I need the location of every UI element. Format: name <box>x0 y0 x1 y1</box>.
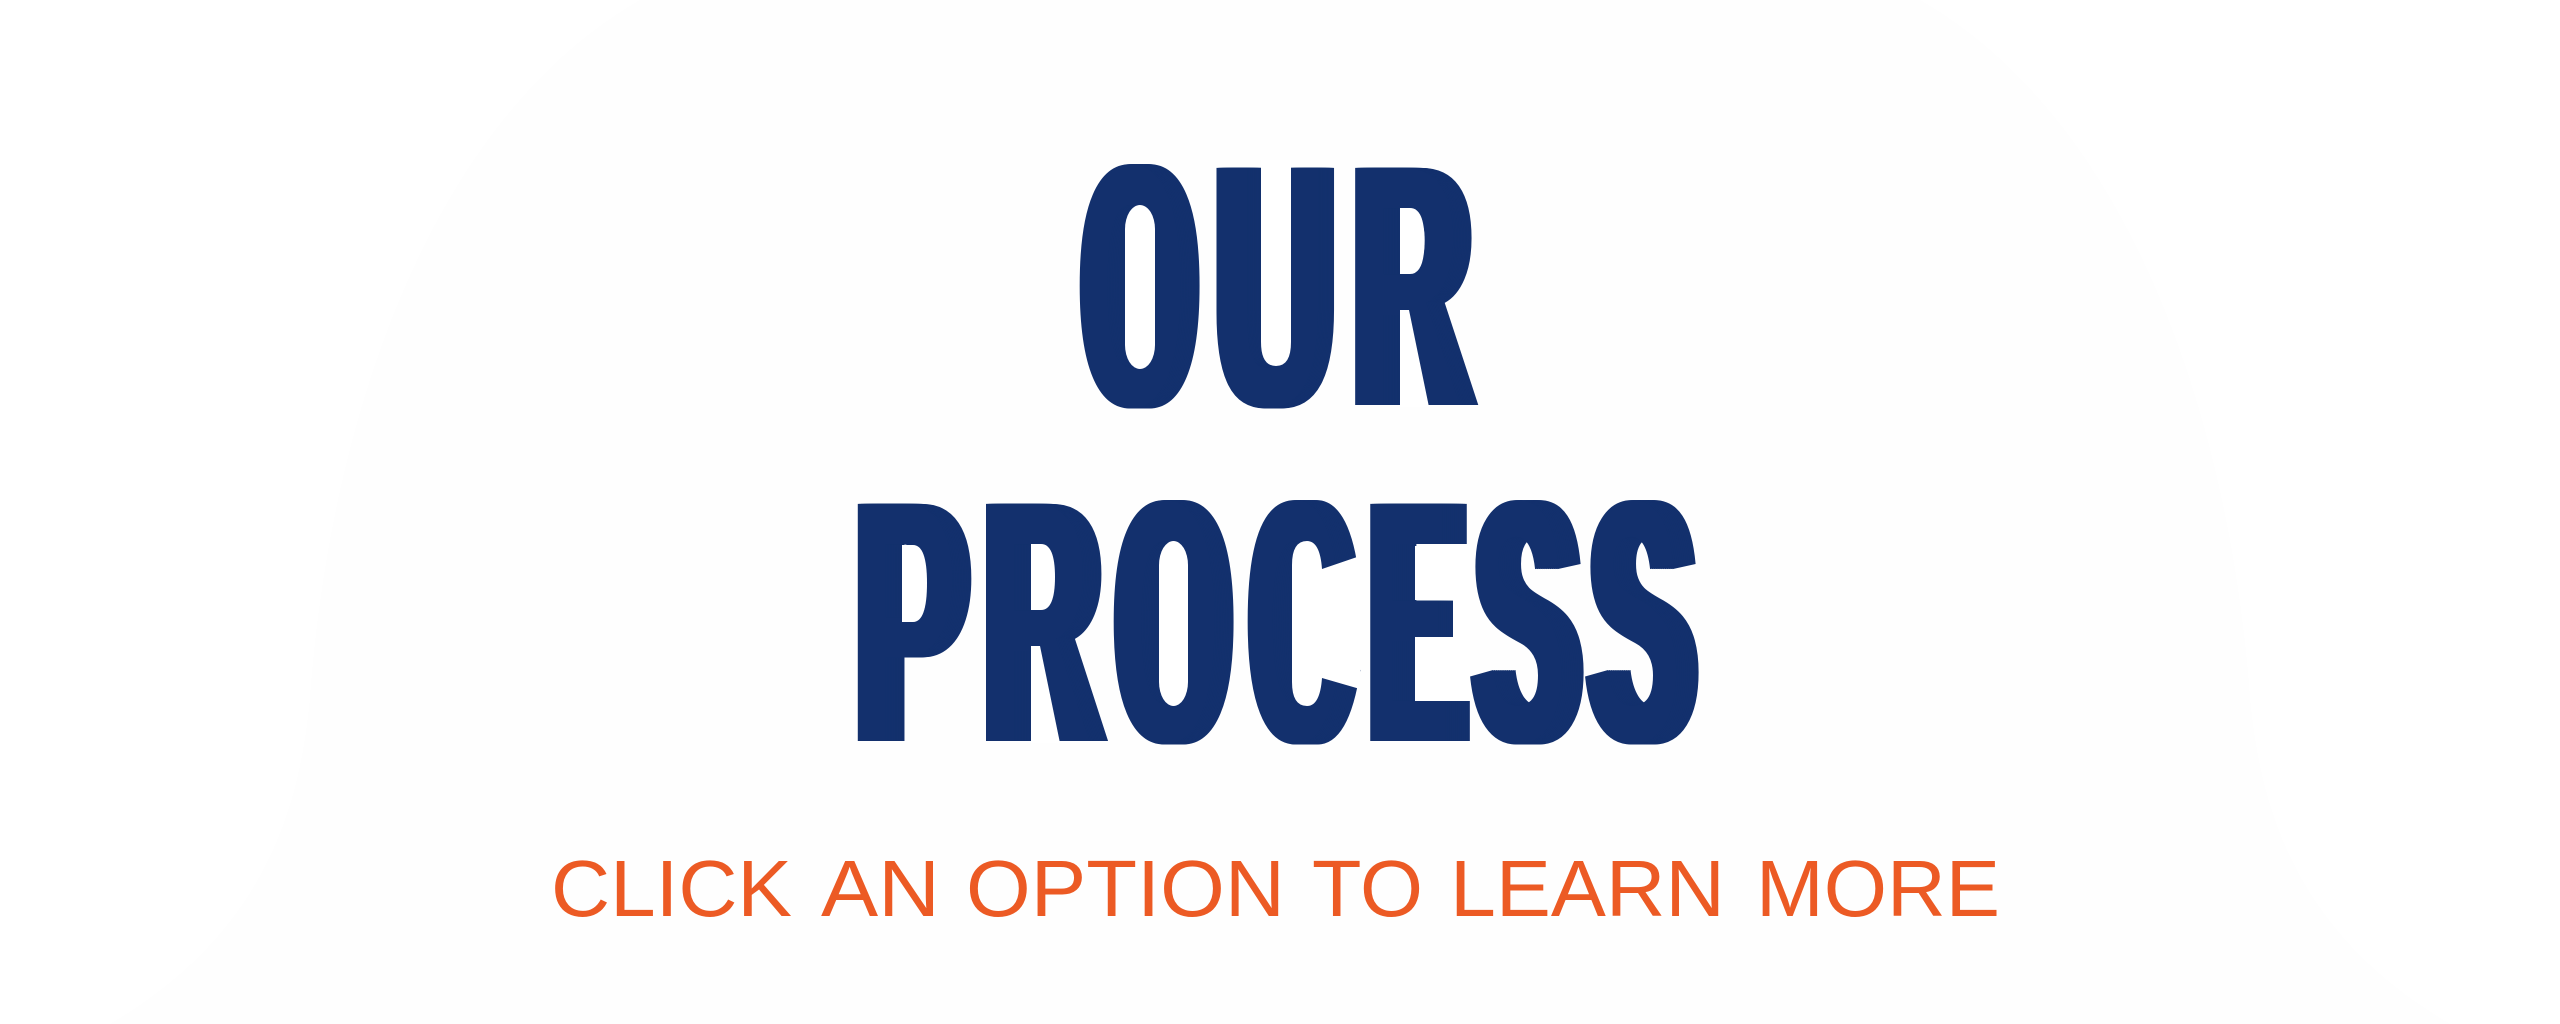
heading: PROCESS: S <box>1582 442 1681 850</box>
heading: PROCESS: O <box>1107 442 1222 850</box>
heading: PROCESS <box>844 442 1699 850</box>
heading: PROCESS: E <box>1360 442 1452 850</box>
subtitle: click an option to learn more: LEARN <box>1450 844 1725 933</box>
heading: OUR: R <box>1342 106 1460 514</box>
subtitle: click an option to learn more: OPTION <box>966 844 1285 933</box>
subtitle: click an option to learn more: CLICK <box>551 844 792 933</box>
heading: PROCESS: P <box>844 442 960 850</box>
subtitle: click an option to learn more: TO <box>1312 844 1423 933</box>
heading: OUR: O <box>1073 106 1188 514</box>
heading: OUR <box>1073 106 1478 514</box>
heading: PROCESS: R <box>973 442 1090 850</box>
subtitle: click an option to learn more: AN <box>821 844 940 933</box>
subtitle: click an option to learn more: MORE <box>1756 844 2000 933</box>
heading: PROCESS: C <box>1240 442 1343 850</box>
heading: OUR: U <box>1203 106 1332 514</box>
heading: PROCESS: S <box>1467 442 1566 850</box>
